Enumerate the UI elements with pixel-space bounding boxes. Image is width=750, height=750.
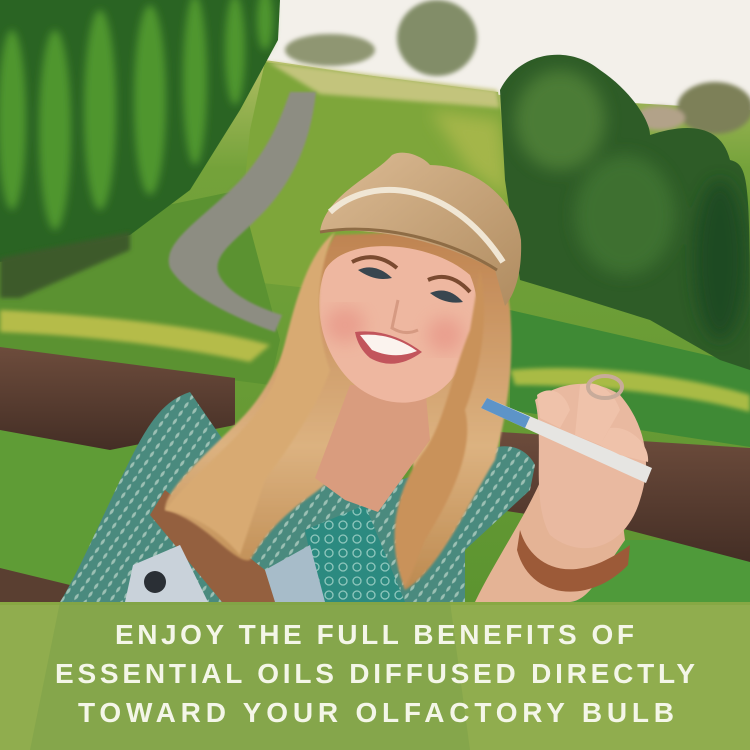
hill highlight [268, 62, 500, 108]
left hedge [0, 0, 280, 262]
dress flower [144, 571, 166, 593]
fingers [537, 383, 648, 462]
distant trees [285, 0, 750, 134]
sunlit meadow band [0, 310, 270, 362]
hedge trunks shadow [0, 232, 130, 298]
left meadow [0, 190, 280, 385]
dress blue panel [265, 545, 325, 602]
banner [0, 602, 750, 750]
hat [320, 153, 521, 306]
caption line 2: ESSENTIAL OILS DIFFUSED DIRECTLY [55, 658, 695, 689]
dress border band [150, 490, 295, 602]
road [169, 92, 316, 332]
dress neckline pattern [305, 505, 405, 602]
hair front right [395, 270, 484, 590]
fence top rail left [0, 347, 235, 450]
lower right grass shade [510, 310, 750, 447]
sunlit meadow right [510, 368, 750, 412]
banner background [0, 602, 750, 750]
caption line 1: ENJOY THE FULL BENEFITS OF [115, 619, 634, 650]
pen [481, 398, 652, 483]
lower left grass [0, 430, 260, 605]
woman [60, 153, 652, 602]
dress [60, 392, 535, 602]
dress white patch [125, 545, 208, 602]
face [319, 246, 477, 403]
bracelet [517, 530, 630, 592]
cheeks [325, 307, 463, 353]
eyes [352, 257, 470, 303]
fence top rail right [500, 432, 750, 562]
arm [475, 470, 625, 602]
banner dress ghost [30, 602, 470, 750]
fence lower rail [0, 568, 70, 602]
base grass [0, 60, 750, 605]
hill sun patch [430, 110, 510, 200]
ring [588, 376, 622, 398]
hair back [165, 230, 511, 590]
right bushes [500, 55, 750, 370]
hill top [235, 62, 510, 310]
caption line 3: TOWARD YOUR OLFACTORY BULB [78, 697, 674, 728]
sky [265, 0, 750, 110]
hand [535, 384, 646, 548]
smile [355, 331, 422, 364]
hair front left [165, 232, 335, 555]
neck and chest [315, 385, 430, 512]
nose [392, 300, 418, 333]
lower right grass [560, 540, 750, 605]
